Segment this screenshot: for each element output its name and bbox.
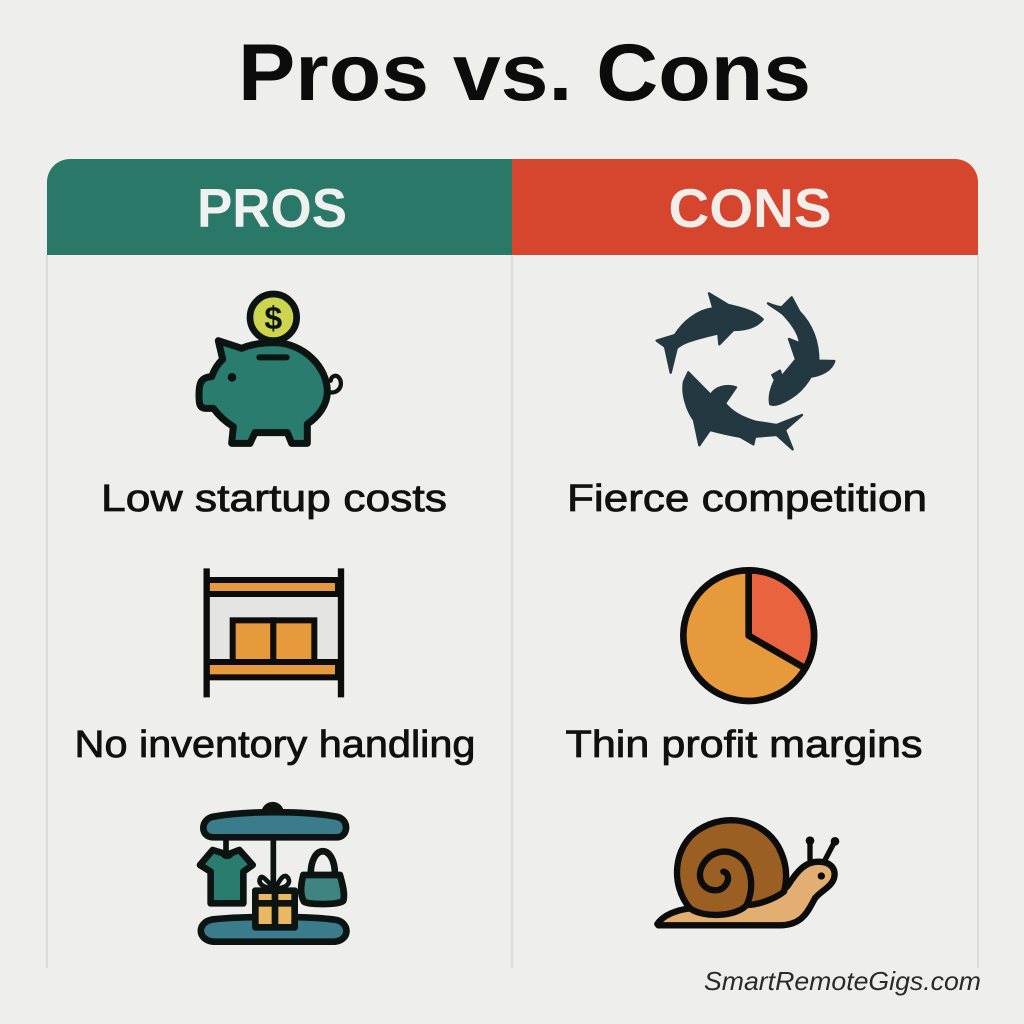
title: Pros vs. Cons [238, 28, 811, 118]
heading: CONS: CONS [668, 177, 832, 239]
icon: circling sharks [657, 293, 834, 449]
label: low startup costs: Low startup costs [101, 478, 447, 520]
panel: pros header [47, 159, 512, 255]
icon: piggy bank with coin: $ [264, 300, 282, 336]
label: fierce competition: Fierce competition [567, 478, 927, 520]
icon: product carousel [200, 805, 346, 942]
heading: PROS: PROS [197, 177, 347, 239]
icon: piggy bank with coin [199, 294, 341, 443]
watermark: SmartRemoteGigs.com [704, 966, 981, 996]
icon: pie chart thin margin [683, 570, 814, 701]
icon: snail [657, 820, 839, 925]
label: thin profit margins: Thin profit margins [566, 724, 922, 766]
panel: cons header [512, 159, 978, 255]
icon: warehouse shelves [207, 568, 341, 697]
label: no inventory handling: No inventory handling [74, 724, 475, 766]
